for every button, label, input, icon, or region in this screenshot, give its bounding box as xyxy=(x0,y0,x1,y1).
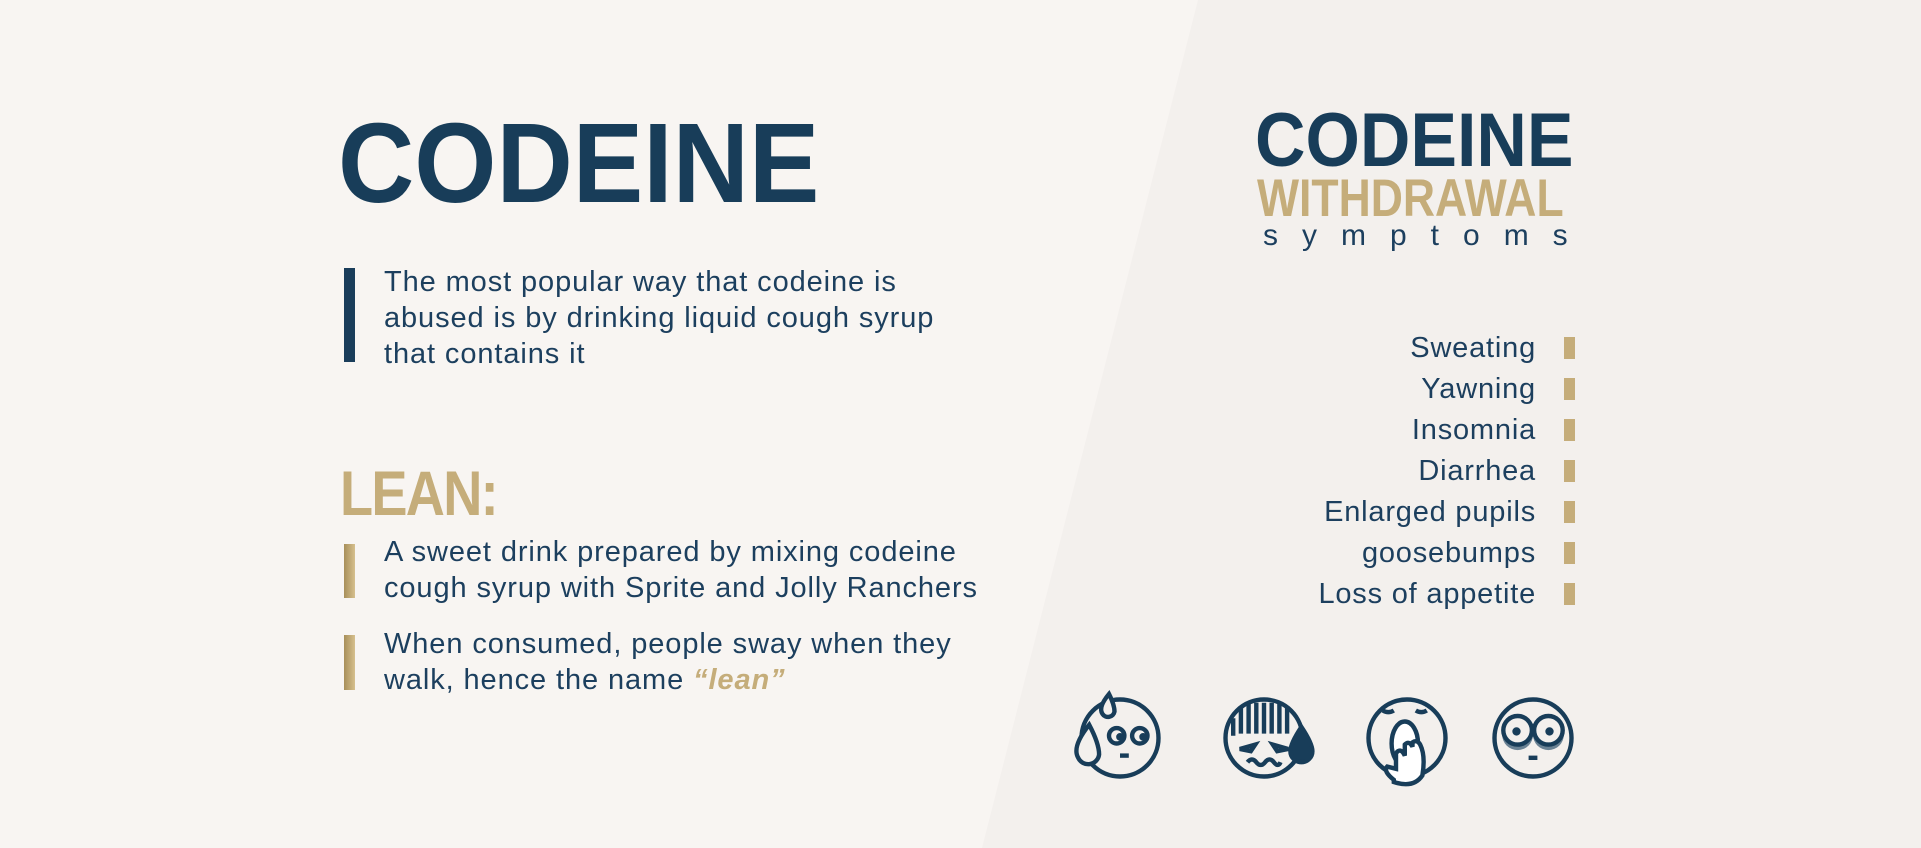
icon: enlarged pupils face xyxy=(1494,700,1572,776)
text block: lean name xyxy=(344,628,952,696)
text block: intro: abused is by drinking liquid cough syrup xyxy=(384,302,934,334)
symptom list: Diarrhea xyxy=(1418,455,1536,487)
symptom list xyxy=(1318,332,1575,610)
text block: lean definition: cough syrup with Sprite and Jolly Ranchers xyxy=(384,572,978,604)
text block: intro xyxy=(344,266,934,370)
icon: sweating face xyxy=(1076,694,1158,776)
heading: lean: LEAN: xyxy=(340,459,497,529)
icon: insomnia face xyxy=(1226,700,1312,776)
logo: CODEINE xyxy=(1255,98,1574,183)
icons row xyxy=(1074,690,1574,786)
symptom list: Loss of appetite xyxy=(1318,578,1536,610)
logo: symptoms xyxy=(1263,219,1592,252)
symptom list: Enlarged pupils xyxy=(1324,496,1536,528)
logo xyxy=(1255,98,1592,252)
text block: lean definition xyxy=(344,536,978,604)
text block: intro: The most popular way that codeine is xyxy=(384,266,897,298)
logo: WITHDRAWAL xyxy=(1257,169,1564,228)
icon: yawning face xyxy=(1368,700,1446,784)
symptom list: Sweating xyxy=(1410,332,1536,364)
text block: lean name: walk, hence the name “lean” xyxy=(384,664,786,696)
text block: lean definition: A sweet drink prepared by mixing codeine xyxy=(384,536,957,568)
symptom list: Insomnia xyxy=(1412,414,1536,446)
symptom list: Yawning xyxy=(1421,373,1536,405)
symptom list: goosebumps xyxy=(1362,537,1536,569)
text block: intro: that contains it xyxy=(384,338,585,370)
text block: lean name: When consumed, people sway when they xyxy=(384,628,952,660)
title: CODEINE xyxy=(338,100,819,226)
